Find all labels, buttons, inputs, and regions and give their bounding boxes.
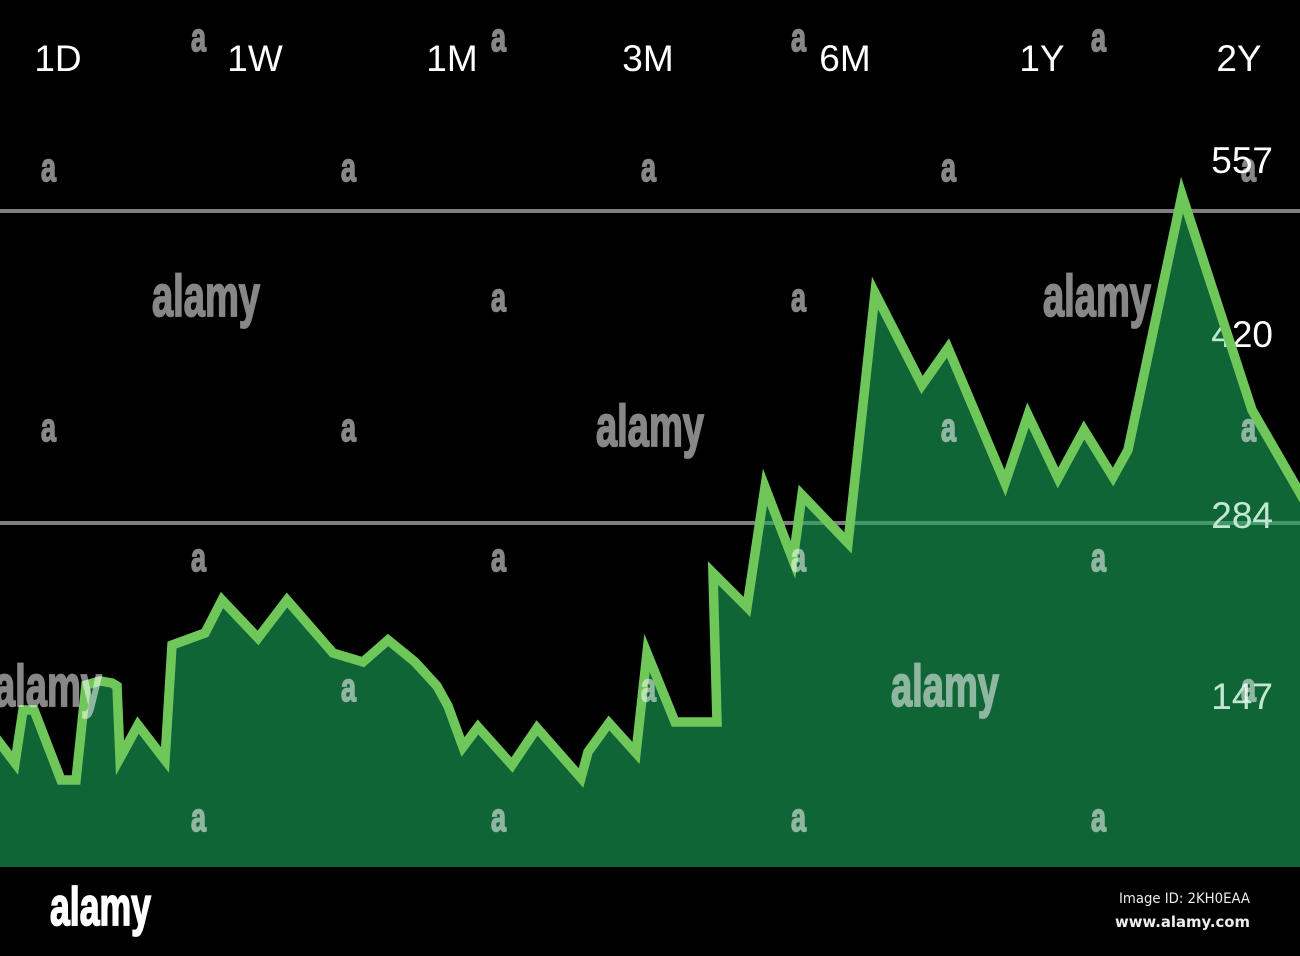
y-axis value labels: 557 — [1211, 140, 1273, 181]
watermark: small letters: a — [791, 16, 807, 60]
watermark: small letters: a — [341, 146, 357, 190]
watermark: small letters: a — [791, 276, 807, 320]
watermark: small letters: a — [1091, 536, 1107, 580]
value labels over the fill: 420 — [1211, 314, 1273, 355]
website: www.alamy.com — [1115, 913, 1250, 931]
time range labels — [34, 38, 1262, 79]
watermark: small letters: a — [791, 796, 807, 840]
watermark: small letters: a — [641, 146, 657, 190]
watermark: small letters: a — [791, 536, 807, 580]
watermark: alamy wordmarks: alamy — [891, 654, 999, 719]
watermark: small letters: a — [341, 666, 357, 710]
watermark: small letters: a — [191, 536, 207, 580]
image id: Image ID: 2KH0EAA — [1119, 891, 1250, 907]
watermark: small letters: a — [1241, 666, 1257, 710]
watermark: alamy wordmarks: alamy — [152, 264, 260, 329]
y-axis value labels: 284 — [1211, 495, 1273, 536]
watermark: small letters: a — [41, 406, 57, 450]
watermark: small letters: a — [41, 146, 57, 190]
time range labels: 3M — [622, 38, 674, 79]
watermark: small letters: a — [491, 276, 507, 320]
value labels over the fill: 284 — [1211, 495, 1273, 536]
watermark: small letters: a — [341, 406, 357, 450]
footer logo: alamy — [50, 877, 151, 937]
footer bar — [0, 867, 1300, 956]
watermark: small letters: a — [1091, 16, 1107, 60]
watermark: small letters: a — [191, 16, 207, 60]
watermark: small letters: a — [491, 16, 507, 60]
watermark: small letters: a — [491, 796, 507, 840]
watermark: small letters: a — [1091, 796, 1107, 840]
watermark: alamy wordmarks — [0, 264, 1151, 719]
y-axis value labels: 420 — [1211, 314, 1273, 355]
time range labels: 6M — [819, 38, 871, 79]
value labels over the fill: 147 — [1211, 676, 1273, 717]
watermark: small letters: a — [1241, 146, 1257, 190]
watermark: small letters: a — [641, 666, 657, 710]
price line — [0, 195, 1300, 780]
time range labels: 1Y — [1019, 38, 1065, 79]
time range labels: 2Y — [1216, 38, 1262, 79]
watermark: small letters: a — [941, 406, 957, 450]
value labels over the fill — [1211, 314, 1273, 717]
time range labels: 1M — [426, 38, 478, 79]
watermark: small letters: a — [191, 796, 207, 840]
time range labels: 1D — [34, 38, 82, 79]
y-axis value labels: 147 — [1211, 676, 1273, 717]
watermark: small letters: a — [491, 536, 507, 580]
y-axis value labels — [1211, 140, 1273, 717]
watermark: small letters: a — [1241, 406, 1257, 450]
time range labels: 1W — [227, 38, 283, 79]
watermark: small letters: a — [941, 146, 957, 190]
area chart fill — [0, 195, 1300, 867]
watermark: alamy wordmarks: alamy — [596, 394, 704, 459]
watermark: alamy wordmarks: alamy — [1043, 264, 1151, 329]
